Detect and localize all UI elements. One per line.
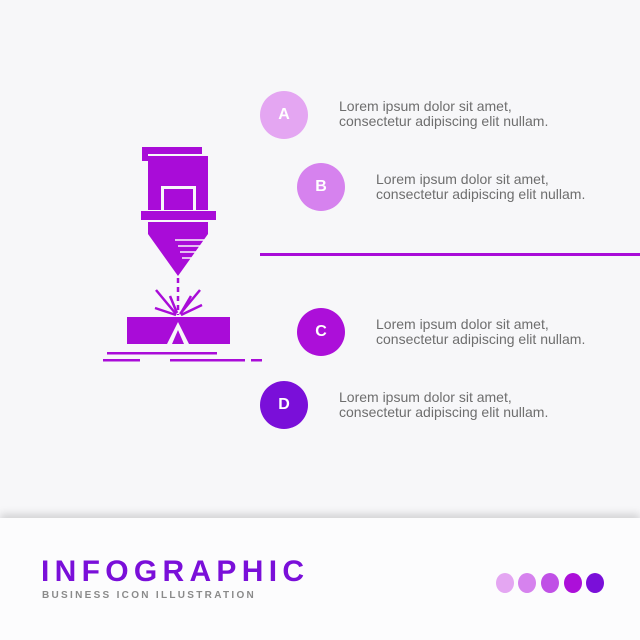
circle A (260, 91, 308, 139)
text B: consectetur adipiscing elit nullam. (376, 186, 585, 202)
text B: Lorem ipsum dolor sit amet, (376, 171, 549, 187)
text C: Lorem ipsum dolor sit amet, (376, 316, 549, 332)
text D (339, 389, 548, 420)
text A (339, 98, 548, 129)
title: INFOGRAPHIC (41, 555, 309, 588)
text B (376, 171, 585, 202)
text A: Lorem ipsum dolor sit amet, (339, 98, 512, 114)
text D: consectetur adipiscing elit nullam. (339, 404, 548, 420)
subtitle: BUSINESS ICON ILLUSTRATION (42, 590, 256, 601)
circle B (297, 163, 345, 211)
circle A: A (278, 106, 290, 123)
circle D: D (278, 396, 290, 413)
circle C: C (315, 323, 327, 340)
circle C (297, 308, 345, 356)
icon: laser cutting machine (103, 147, 262, 362)
circle B: B (315, 178, 327, 195)
text A: consectetur adipiscing elit nullam. (339, 113, 548, 129)
text D: Lorem ipsum dolor sit amet, (339, 389, 512, 405)
footer panel (0, 518, 640, 640)
circle D (260, 381, 308, 429)
text C: consectetur adipiscing elit nullam. (376, 331, 585, 347)
text C (376, 316, 585, 347)
divider line (260, 253, 640, 256)
